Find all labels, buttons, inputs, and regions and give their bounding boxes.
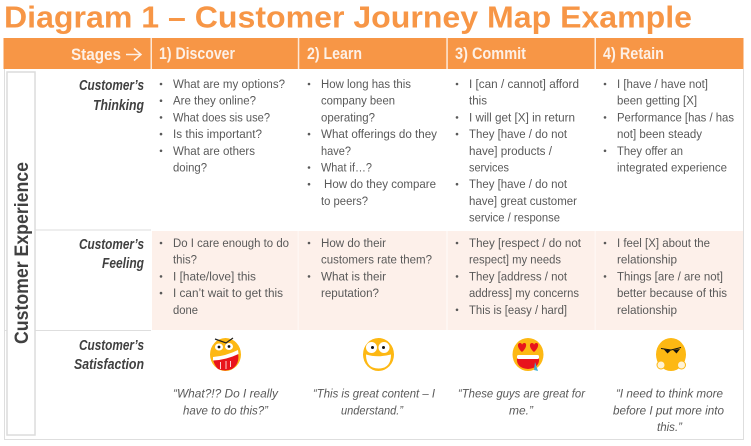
quote: commit: me.”	[509, 403, 534, 417]
quote: retain: this.”	[657, 420, 683, 434]
stage 2 heading: 2) Learn	[307, 45, 362, 63]
thinking: discover: doing?	[173, 160, 207, 174]
thinking: commit	[456, 77, 579, 225]
thinking: discover: What does sis use?	[173, 110, 270, 124]
thinking: commit: They [have / do not	[469, 127, 568, 141]
quote: learn	[313, 387, 436, 417]
thinking: learn: operating?	[321, 110, 375, 124]
feeling: commit: respect] my needs	[469, 253, 561, 267]
feeling: learn: How do their	[321, 236, 386, 250]
thinking: discover: Are they online?	[173, 94, 256, 108]
row label: thinking	[79, 78, 144, 114]
thinking: commit: have] products /	[469, 144, 553, 158]
icon: laughing face	[363, 338, 394, 371]
row label: feeling	[79, 237, 144, 272]
feeling: learn: What is their	[321, 269, 386, 283]
row label: satisfaction	[74, 338, 144, 373]
feeling: retain: I feel [X] about the	[617, 236, 710, 250]
panel: customer experience side label: Customer Experience	[12, 162, 33, 344]
stage 3 heading: 3) Commit	[455, 45, 526, 63]
title: Diagram 1 – Customer Journey Map Example	[4, 0, 692, 34]
thinking: commit: services	[469, 160, 509, 174]
quote: retain: “I need to think more	[616, 387, 723, 401]
row label: thinking: Customer’s	[79, 78, 144, 94]
feeling: retain: relationship	[617, 253, 677, 267]
thinking: learn: have?	[321, 144, 351, 158]
icon: sunglasses skeptical face	[656, 338, 686, 371]
feeling: commit	[456, 236, 582, 317]
panel: customer experience side label	[7, 72, 35, 435]
quote: commit	[458, 387, 586, 417]
thinking: learn: company been	[321, 94, 395, 108]
thinking: discover	[160, 77, 285, 174]
thinking: learn: What offerings do they	[321, 127, 438, 141]
icon: angry shouting face	[210, 338, 241, 371]
feeling: discover: this?	[173, 253, 197, 267]
thinking: retain: Performance [has / has	[617, 110, 734, 124]
header band	[4, 38, 744, 69]
thinking: commit: service / response	[469, 211, 560, 225]
panel: feeling row background	[152, 231, 743, 330]
feeling: commit: This is [easy / hard]	[469, 303, 567, 317]
stage 4 heading: 4) Retain	[603, 45, 664, 63]
quote: retain	[613, 387, 724, 434]
quote: retain: before I put more into	[613, 403, 724, 417]
stages label: Stages	[71, 46, 121, 64]
feeling: commit: They [respect / do not	[469, 236, 582, 250]
thinking: retain	[604, 77, 734, 174]
feeling: discover: Do I care enough to do	[173, 236, 289, 250]
icon: heart eyes face	[512, 338, 544, 371]
feeling: learn: customers rate them?	[321, 253, 432, 267]
feeling: commit: address] my concerns	[469, 286, 579, 300]
thinking: learn: to peers?	[321, 194, 368, 208]
feeling: discover: I can’t wait to get this	[173, 286, 283, 300]
thinking: commit: They [have / do not	[469, 177, 568, 191]
row label: feeling: Feeling	[102, 256, 144, 272]
feeling: commit: They [address / not	[469, 269, 568, 283]
thinking: retain: not] been steady	[617, 127, 703, 141]
arrow: stages	[126, 48, 141, 60]
thinking: commit: this	[469, 94, 487, 108]
stage 1 heading: 1) Discover	[159, 45, 235, 63]
thinking: retain: They offer an	[617, 144, 683, 158]
thinking: learn: How do they compare	[324, 177, 436, 191]
quote: discover	[173, 387, 279, 417]
row label: satisfaction: Customer’s	[79, 338, 144, 354]
feeling: discover: I [hate/love] this	[173, 269, 256, 283]
thinking: learn: How long has this	[321, 77, 411, 91]
feeling: discover	[160, 236, 289, 317]
thinking: learn: What if…?	[321, 160, 372, 174]
thinking: learn	[308, 77, 438, 208]
feeling: learn: reputation?	[321, 286, 379, 300]
thinking: retain: integrated experience	[617, 160, 727, 174]
thinking: discover: Is this important?	[173, 127, 262, 141]
feeling: retain	[604, 236, 727, 317]
quote: commit: “These guys are great for	[458, 387, 586, 401]
quote: learn: “This is great content – I	[313, 387, 436, 401]
thinking: discover: What are others	[173, 144, 255, 158]
row label: feeling: Customer’s	[79, 237, 144, 253]
quote: discover: have to do this?”	[183, 403, 269, 417]
feeling: discover: done	[173, 303, 198, 317]
feeling: retain: relationship	[617, 303, 677, 317]
thinking: commit: I will get [X] in return	[469, 110, 575, 124]
quote: discover: “What?!? Do I really	[173, 387, 279, 401]
quote: learn: understand.”	[341, 403, 404, 417]
feeling: retain: Things [are / are not]	[617, 269, 723, 283]
thinking: retain: been getting [X]	[617, 94, 697, 108]
thinking: retain: I [have / have not]	[617, 77, 708, 91]
thinking: discover: What are my options?	[173, 77, 285, 91]
row label: thinking: Thinking	[93, 98, 144, 114]
thinking: commit: I [can / cannot] afford	[469, 77, 579, 91]
feeling: learn	[308, 236, 432, 300]
thinking: commit: have] great customer	[469, 194, 577, 208]
feeling: retain: better because of this	[617, 286, 727, 300]
row label: satisfaction: Satisfaction	[74, 357, 144, 373]
